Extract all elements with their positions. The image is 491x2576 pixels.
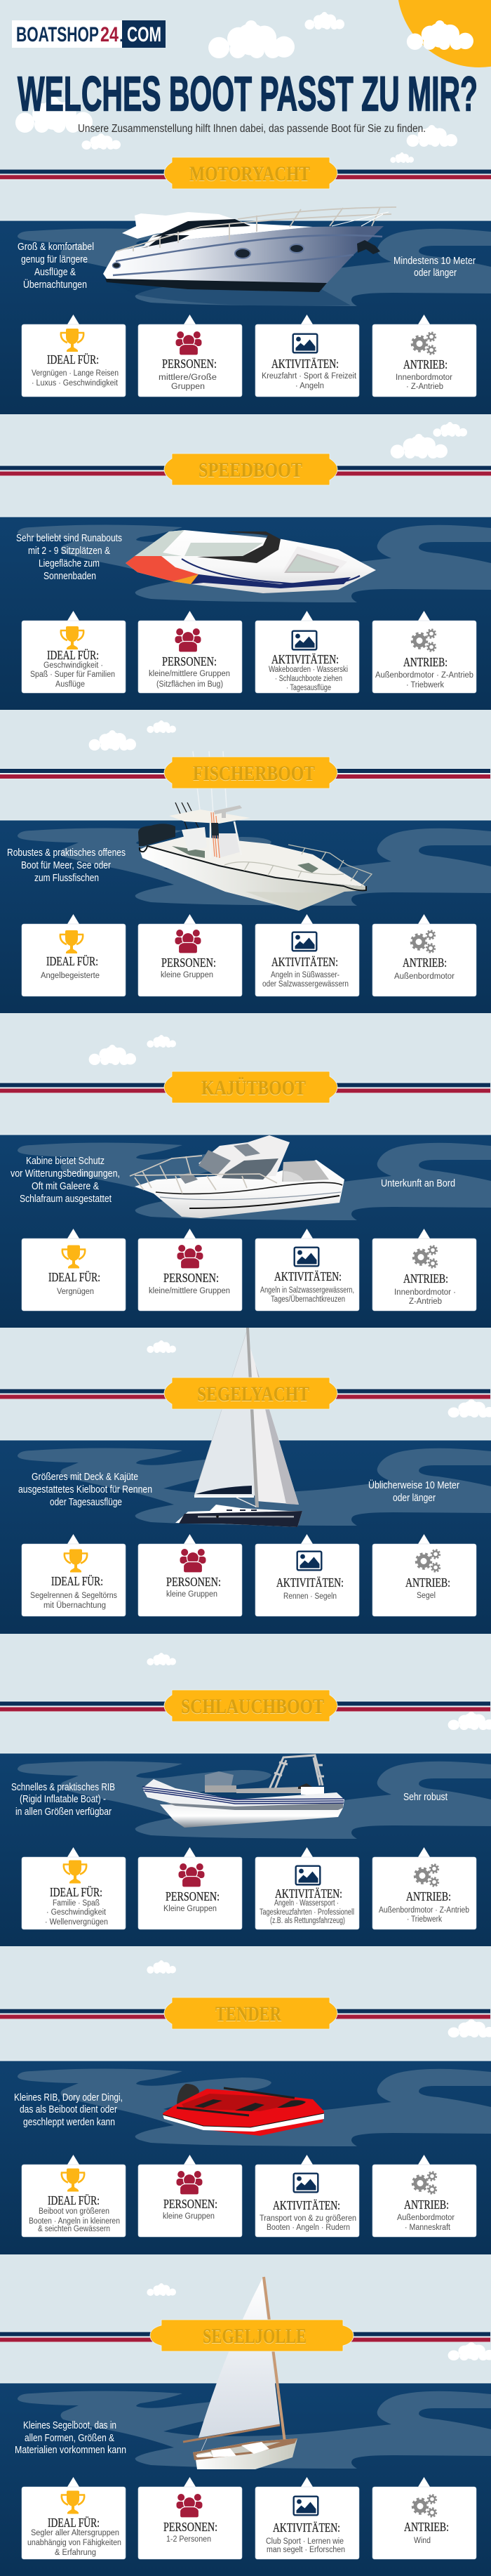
cards: Segeljolle: & Erfahrung [55, 2549, 96, 2557]
boat: speedboot [126, 530, 376, 593]
left description: Kleines Segelboot, das in [23, 2419, 116, 2431]
cards: Tender: AKTIVITÄTEN: [273, 2198, 340, 2212]
left description: Schnelles & praktisches RIB [11, 1781, 115, 1793]
cards: Fischerboot [41, 930, 455, 989]
cards: Tender: Außenbordmotor [397, 2214, 455, 2222]
cards: Segeljolle: man segelt · Erforschen [267, 2546, 345, 2554]
cards: Speedboot: kleine/mittlere Gruppen [149, 670, 230, 678]
panel: Fischerboot [0, 720, 491, 1013]
boat: segeljolle [183, 2277, 297, 2469]
left description: Übernachtungen [23, 278, 87, 291]
cards: Schlauchboot: ANTRIEB: [406, 1889, 451, 1903]
cards: Motoryacht: Innenbordmotor [396, 374, 452, 382]
left description: Sehr beliebt sind Runabouts [16, 532, 122, 544]
panel: Kajütboot [0, 1035, 491, 1328]
subtitle: Unsere Zusammenstellung hilft Ihnen dabei, das passende Boot für Sie zu finden. [78, 123, 426, 135]
left description [11, 1781, 115, 1818]
logo: 24 [100, 23, 119, 46]
panel: Tender [0, 1960, 491, 2254]
cards: Schlauchboot: · Geschwindigkeit [46, 1908, 107, 1917]
cards: Speedboot: (Sitzflächen im Bug) [156, 680, 223, 689]
right description: Sehr robust [403, 1791, 448, 1803]
cards: Speedboot: · Triebwerk [406, 681, 444, 689]
logo: . [119, 27, 123, 45]
cards: Tender: PERSONEN: [163, 2197, 217, 2211]
cards: Segelyacht: AKTIVITÄTEN: [276, 1576, 344, 1590]
cards: Kajütboot: kleine/mittlere Gruppen [149, 1287, 230, 1295]
heading: Kajütboot: KAJÜTBOOT [201, 1076, 306, 1099]
cards: Kajütboot: Tages/Übernachtkreuzen [271, 1295, 345, 1304]
cards: Tender: & seichten Gewässern [38, 2225, 110, 2233]
left description [7, 847, 126, 884]
cards: Segeljolle: PERSONEN: [163, 2520, 217, 2534]
cards: Tender: Booten · Angeln in kleineren [29, 2217, 120, 2226]
cards: Speedboot: Wakeboarden · Wasserski [269, 666, 348, 674]
cards: Schlauchboot [45, 1861, 469, 1927]
cards: Segelyacht: Rennen · Segeln [283, 1592, 337, 1601]
cards: Speedboot: · Schlauchboote ziehen [275, 675, 342, 683]
cards: Tender [29, 2168, 455, 2233]
cards: Schlauchboot: IDEAL FÜR: [50, 1885, 102, 1899]
left description: das als Beiboot dient oder [20, 2103, 117, 2115]
cards: Tender: Beiboot von größeren [39, 2207, 109, 2216]
cards: Kajütboot: Angeln in Salzwassergewässern, [260, 1286, 354, 1295]
left description [18, 1471, 152, 1508]
left description: Schlafraum ausgestattet [20, 1193, 112, 1205]
panel: Segelyacht [0, 1328, 491, 1634]
boat: kajütboot [130, 1135, 344, 1218]
cards: Motoryacht: IDEAL FÜR: [47, 352, 99, 366]
cards: Schlauchboot: Angeln · Wassersport · [274, 1899, 339, 1908]
cards: Motoryacht: Gruppen [171, 383, 205, 391]
right description [394, 255, 476, 279]
left description: Robustes & praktisches offenes [7, 847, 126, 859]
cards: Segelyacht: IDEAL FÜR: [51, 1574, 103, 1588]
cards: Segeljolle: IDEAL FÜR: [48, 2516, 100, 2530]
cards: Kajütboot: ANTRIEB: [403, 1272, 448, 1286]
left description: Größeres mit Deck & Kajüte [32, 1471, 138, 1483]
cards: Segeljolle: AKTIVITÄTEN: [273, 2521, 340, 2535]
cards: Segelyacht [30, 1549, 450, 1610]
heading plate: Segeljolle: SEGELJOLLE [203, 2325, 307, 2348]
heading: Segelyacht: SEGELYACHT [197, 1382, 309, 1406]
cards: Segelyacht: Segel [417, 1592, 436, 1600]
left description: Oft mit Galeere & [32, 1180, 99, 1192]
cards: Motoryacht: · Luxus · Geschwindigkeit [32, 379, 119, 388]
cards: Speedboot: Spaß · Super für Familien [30, 671, 115, 679]
logo [12, 20, 166, 48]
cards: Segeljolle [27, 2491, 449, 2557]
cards: Fischerboot: kleine Gruppen [161, 971, 213, 979]
cards: Schlauchboot: Familie · Spaß [53, 1899, 100, 1908]
cards: Fischerboot: Außenbordmotor [394, 972, 455, 981]
left description: Kleines RIB, Dory oder Dingi, [14, 2092, 123, 2103]
cards: Motoryacht [32, 329, 452, 391]
cards: Fischerboot: Angelbegeisterte [41, 972, 100, 980]
left description: vor Witterungsbedingungen, [11, 1168, 120, 1180]
panel: Schlauchboot [0, 1653, 491, 1946]
heading: Motoryacht: MOTORYACHT [189, 162, 310, 185]
left description [15, 2419, 126, 2456]
logo: BOATSHOP [16, 23, 99, 46]
cards: Motoryacht: ANTRIEB: [403, 357, 448, 371]
left description [16, 532, 122, 582]
left description: allen Formen, Größen & [25, 2432, 114, 2444]
cards: Fischerboot: ANTRIEB: [403, 956, 447, 970]
heading: Tender: TENDER [215, 2002, 281, 2026]
cards: Tender: kleine Gruppen [163, 2212, 215, 2221]
cards: Segeljolle: unabhängig von Fähigkeiten [27, 2539, 121, 2547]
cards: Segeljolle: 1-2 Personen [166, 2535, 211, 2544]
cards: Schlauchboot: Kleine Gruppen [163, 1905, 217, 1913]
right description: Üblicherweise 10 Meter [368, 1479, 459, 1491]
cards: Segelyacht: ANTRIEB: [405, 1576, 450, 1590]
left description: Ausflüge & [34, 266, 76, 278]
right description: oder länger [414, 267, 457, 279]
cards: Speedboot: Geschwindigkeit · [43, 661, 103, 670]
left description: ausgestattetes Kielboot für Rennen [18, 1484, 152, 1495]
cards: Segelyacht: Segelrennen & Segeltörns [30, 1592, 117, 1600]
left description: geschleppt werden kann [23, 2116, 115, 2128]
cards: Fischerboot: IDEAL FÜR: [46, 954, 98, 968]
header clouds [15, 12, 473, 163]
cards: Speedboot: AKTIVITÄTEN: [271, 652, 339, 666]
cards: Kajütboot: Innenbordmotor · [394, 1288, 456, 1297]
cards: Speedboot: · Tagesausflüge [286, 684, 331, 692]
cards: Tender: IDEAL FÜR: [48, 2193, 100, 2207]
cards: Fischerboot: AKTIVITÄTEN: [271, 955, 338, 969]
right description: oder länger [393, 1492, 436, 1504]
left description: Sonnenbaden [43, 570, 96, 582]
cards: Tender: ANTRIEB: [404, 2198, 449, 2212]
cards: Segeljolle: ANTRIEB: [404, 2520, 449, 2534]
left description: genug für längere [21, 253, 88, 265]
left description: Kabine bietet Schutz [26, 1155, 105, 1167]
heading: Schlauchboot: SCHLAUCHBOOT [181, 1695, 324, 1718]
left description: in allen Größen verfügbar [15, 1806, 112, 1818]
cards: Kajütboot: IDEAL FÜR: [48, 1270, 100, 1284]
boat: tender [163, 2084, 324, 2136]
left description: mit 2 - 9 Sitzplätzen & [28, 545, 110, 557]
cards: Motoryacht: · Z-Antrieb [406, 383, 443, 391]
cards: Speedboot: Außenbordmotor · Z-Antrieb [375, 671, 473, 680]
cards: Fischerboot: oder Salzwassergewässern [262, 980, 349, 989]
heading: Fischerboot: FISCHERBOOT [193, 762, 315, 785]
cards: Segelyacht: PERSONEN: [166, 1575, 221, 1589]
left description: oder Tagesausflüge [50, 1496, 122, 1508]
left description [18, 241, 94, 291]
cards: Segeljolle: Segler aller Altersgruppen [31, 2529, 119, 2537]
cards: Speedboot: ANTRIEB: [403, 655, 448, 669]
boat: schlauchboot [142, 1755, 344, 1828]
panel: Speedboot [0, 422, 491, 710]
cards: Kajütboot: PERSONEN: [163, 1271, 219, 1285]
cards: Motoryacht: AKTIVITÄTEN: [271, 357, 339, 371]
boat: motoryacht [103, 207, 396, 292]
logo: COM [127, 23, 161, 46]
cards: Schlauchboot: AKTIVITÄTEN: [275, 1887, 342, 1901]
cards: Segelyacht: mit Übernachtung [43, 1601, 106, 1610]
panel: Segeljolle [0, 2277, 491, 2576]
heading plate: Segeljolle [150, 2320, 354, 2351]
cards: Motoryacht: mittlere/Große [159, 374, 217, 382]
icon: sun [397, 0, 491, 67]
panel: Motoryacht [0, 157, 491, 414]
cards: Speedboot: IDEAL FÜR: [47, 648, 99, 662]
cards: Schlauchboot: · Wellenvergnügen [45, 1918, 108, 1927]
cards: Speedboot: PERSONEN: [162, 654, 217, 668]
cards: Motoryacht: · Angeln [295, 382, 324, 390]
left description: (Rigid Inflatable Boat) - [20, 1793, 106, 1805]
left description: zum Flussfischen [34, 872, 99, 884]
cards: Tender: Booten · Angeln · Rudern [267, 2224, 350, 2232]
cards: Schlauchboot: Tageskreuzfahrten · Professionell [260, 1908, 354, 1917]
left description [11, 1155, 120, 1205]
cards: Motoryacht: Kreuzfahrt · Sport & Freizeit [262, 372, 357, 381]
cards: Kajütboot: Vergnügen [57, 1288, 94, 1296]
cards: Segelyacht: kleine Gruppen [166, 1590, 217, 1599]
cards: Kajütboot: AKTIVITÄTEN: [274, 1269, 342, 1283]
left description: Boot für Meer, See oder [21, 859, 111, 871]
cards: Kajütboot [48, 1245, 456, 1306]
cards: Motoryacht: PERSONEN: [162, 357, 217, 371]
cards: Tender: Transport von & zu größeren [260, 2214, 356, 2223]
cards: Schlauchboot: (z.B. als Rettungsfahrzeug) [270, 1917, 345, 1925]
boat: segelyacht [175, 1328, 302, 1527]
boat: fischerboot [138, 751, 372, 911]
left description: Groß & komfortabel [18, 241, 94, 253]
left description [14, 2092, 123, 2128]
right description: Unterkunft an Bord [381, 1177, 455, 1189]
cards: Segeljolle: Wind [414, 2537, 431, 2545]
cards: Fischerboot: Angeln in Süßwasser- [271, 971, 339, 979]
cards: Schlauchboot: PERSONEN: [166, 1889, 220, 1903]
cards: Motoryacht: Vergnügen · Lange Reisen [32, 369, 119, 378]
left description: Materialien vorkommen kann [15, 2444, 126, 2456]
cards: Segeljolle: Club Sport · Lernen wie [266, 2537, 344, 2546]
cards: Kajütboot: Z-Antrieb [409, 1297, 442, 1306]
cards: Schlauchboot: · Triebwerk [407, 1915, 442, 1924]
left description: Liegefläche zum [39, 557, 100, 569]
right description: Mindestens 10 Meter [394, 255, 476, 267]
cards: Tender: · Manneskraft [405, 2224, 451, 2232]
cards: Fischerboot: PERSONEN: [161, 956, 216, 970]
cards: Speedboot [30, 626, 473, 692]
right description [368, 1479, 459, 1504]
heading: Speedboot: SPEEDBOOT [199, 458, 302, 482]
cards: Speedboot: Ausflüge [55, 680, 85, 689]
cards: Schlauchboot: Außenbordmotor · Z-Antrieb [379, 1906, 469, 1915]
